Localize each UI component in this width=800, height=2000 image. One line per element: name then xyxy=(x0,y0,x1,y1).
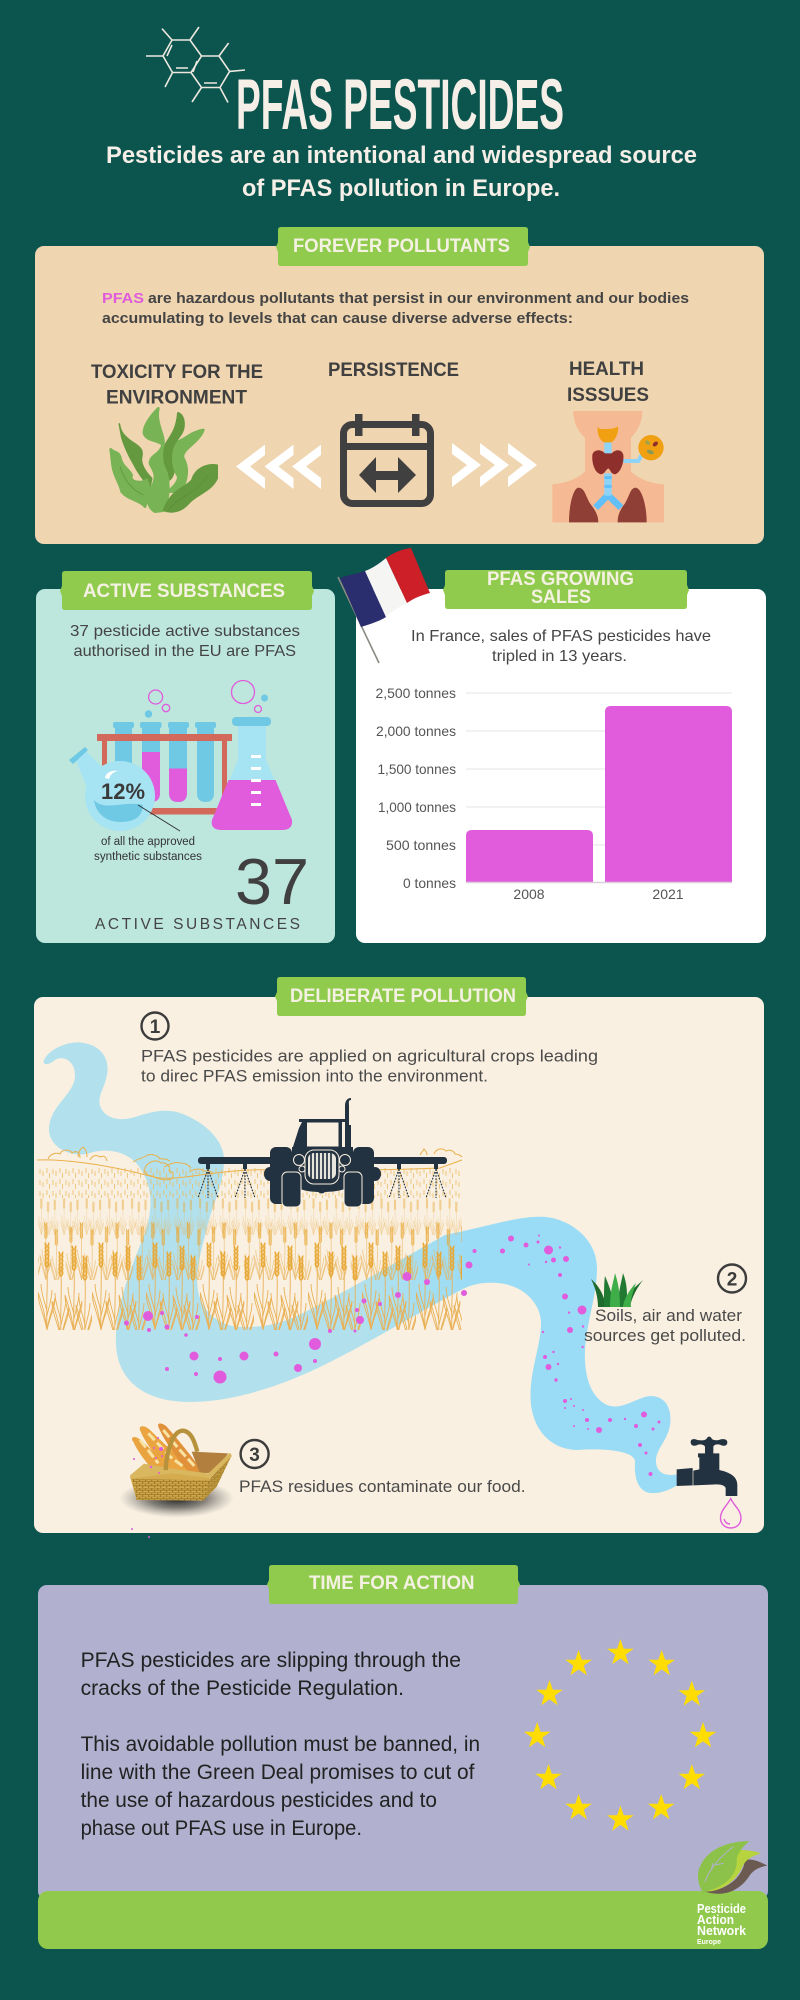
icon: French flag xyxy=(338,548,430,663)
subtitle: Pesticides are an intentional and widespread source xyxy=(106,142,697,169)
call to action text xyxy=(81,1649,480,1840)
arrows: pointing left xyxy=(236,445,321,489)
illustration: tractor with sprayer xyxy=(198,1098,447,1207)
call to action text: PFAS pesticides are slipping through the xyxy=(81,1649,461,1672)
tag: time for action xyxy=(267,1565,520,1604)
bar chart xyxy=(376,685,732,902)
text: step 2: Soils, air and water xyxy=(595,1307,743,1325)
icon: calendar xyxy=(343,414,431,504)
caption: of all approved: of all the approved xyxy=(101,836,195,848)
call to action text: phase out PFAS use in Europe. xyxy=(81,1817,362,1840)
icon: number 1: 1 xyxy=(150,1017,161,1038)
heading: persistence: PERSISTENCE xyxy=(328,359,459,381)
leader line xyxy=(138,805,180,831)
bar chart: 500 tonnes xyxy=(386,837,456,853)
heading: toxicity: ENVIRONMENT xyxy=(106,386,247,408)
tag: deliberate pollution xyxy=(275,977,528,1016)
text: 37 substances authorised: authorised in the EU are PFAS xyxy=(74,643,296,660)
bar chart: 1,500 tonnes xyxy=(378,761,456,777)
bar chart: 2,500 tonnes xyxy=(376,685,456,701)
logo: Pesticide Action Network Europe: Action xyxy=(697,1913,734,1927)
text: step 1: to direc PFAS emission into the environment. xyxy=(141,1068,488,1086)
tag: forever pollutants xyxy=(276,227,530,266)
heading: health issues: ISSSUES xyxy=(567,384,649,406)
panel: time for action xyxy=(38,1565,768,1949)
illustration: wheat field xyxy=(37,1147,462,1330)
text: sales tripled: In France, sales of PFAS pesticides have xyxy=(411,628,711,645)
heading: health issues xyxy=(567,358,649,406)
panel: forever pollutants xyxy=(35,227,764,544)
call to action text: cracks of the Pesticide Regulation. xyxy=(81,1677,404,1700)
caption: of all approved xyxy=(94,836,202,863)
arrows: pointing right xyxy=(452,443,537,487)
text: step 1: PFAS pesticides are applied on agricultural crops leading xyxy=(141,1048,598,1066)
tag: deliberate pollution: DELIBERATE POLLUTION xyxy=(290,985,516,1007)
pesticide particles xyxy=(124,1234,660,1538)
intro text: PFAS xyxy=(102,290,144,307)
label: active substances: ACTIVE SUBSTANCES xyxy=(95,916,300,933)
icon: number 3: 3 xyxy=(249,1445,260,1466)
heading: health issues: HEALTH xyxy=(569,358,644,380)
logo: Pesticide Action Network Europe: Network xyxy=(697,1924,746,1938)
text: step 2: sources get polluted. xyxy=(584,1327,746,1345)
bar chart: 2,000 tonnes xyxy=(376,723,456,739)
subtitle xyxy=(106,142,697,202)
residue dots on bread xyxy=(133,1437,163,1474)
logo: Pesticide Action Network Europe: Pesticide xyxy=(697,1902,746,1916)
stat: 37: 37 xyxy=(235,845,309,918)
tag: PFAS growing sales xyxy=(443,568,689,609)
logo: Pesticide Action Network Europe: Europe xyxy=(697,1937,721,1946)
tag: forever pollutants: FOREVER POLLUTANTS xyxy=(293,235,510,257)
bar chart: 2021 xyxy=(652,886,684,902)
text: sales tripled xyxy=(411,628,711,665)
tag: PFAS growing sales: PFAS GROWING xyxy=(487,568,634,590)
panel: PFAS growing sales xyxy=(338,548,766,943)
subtitle: of PFAS pollution in Europe. xyxy=(242,175,560,202)
caption: of all approved: synthetic substances xyxy=(94,851,202,863)
tag: time for action: TIME FOR ACTION xyxy=(309,1572,474,1594)
green footer bar xyxy=(38,1891,768,1949)
heading: toxicity xyxy=(91,361,263,408)
intro text: are hazardous pollutants that persist in our environment and our bodies xyxy=(148,290,689,307)
heading: toxicity: TOXICITY FOR THE xyxy=(91,361,263,383)
icon: seaweed xyxy=(111,408,217,512)
tag: active substances: ACTIVE SUBSTANCES xyxy=(83,580,285,602)
panel: deliberate pollution xyxy=(34,977,764,1538)
logo: Pesticide Action Network Europe xyxy=(697,1841,767,1946)
text: step 2 xyxy=(584,1307,746,1345)
bar chart: 2008 xyxy=(513,886,545,902)
intro text: accumulating to levels that can cause diverse adverse effects: xyxy=(102,310,573,327)
icon: EU stars circle xyxy=(524,1639,716,1831)
icon: water tap xyxy=(677,1437,737,1496)
text: step 1 xyxy=(141,1048,598,1086)
text: step 3: PFAS residues contaminate our food. xyxy=(239,1478,526,1496)
tag: active substances xyxy=(60,571,314,610)
icon: pink water drop xyxy=(720,1498,741,1528)
icon: number 1 xyxy=(142,1012,168,1040)
text: 37 substances authorised xyxy=(70,623,300,660)
intro text xyxy=(102,290,689,327)
tag: PFAS growing sales: SALES xyxy=(531,586,591,608)
call to action text: line with the Green Deal promises to cut of xyxy=(81,1761,475,1784)
stat: 12%: 12% xyxy=(101,779,145,804)
text: sales tripled: tripled in 13 years. xyxy=(492,648,627,665)
icon: human throat and lungs xyxy=(552,411,664,522)
icon: molecule xyxy=(146,27,245,102)
call to action text: the use of hazardous pesticides and to xyxy=(81,1789,437,1812)
illustration: lab glassware xyxy=(69,680,292,831)
call to action text: This avoidable pollution must be banned, in xyxy=(81,1733,480,1756)
icon: grass xyxy=(591,1273,643,1307)
icon: number 3 xyxy=(241,1440,269,1468)
panel: active substances xyxy=(36,571,335,943)
bar chart: 0 tonnes xyxy=(403,875,456,891)
bar chart: 1,000 tonnes xyxy=(378,799,456,815)
text: 37 substances authorised: 37 pesticide active substances xyxy=(70,623,300,640)
icon: number 2 xyxy=(718,1264,746,1292)
river of polluted water xyxy=(44,1042,679,1493)
illustration: bread basket xyxy=(119,1424,234,1518)
icon: number 2: 2 xyxy=(727,1270,737,1290)
